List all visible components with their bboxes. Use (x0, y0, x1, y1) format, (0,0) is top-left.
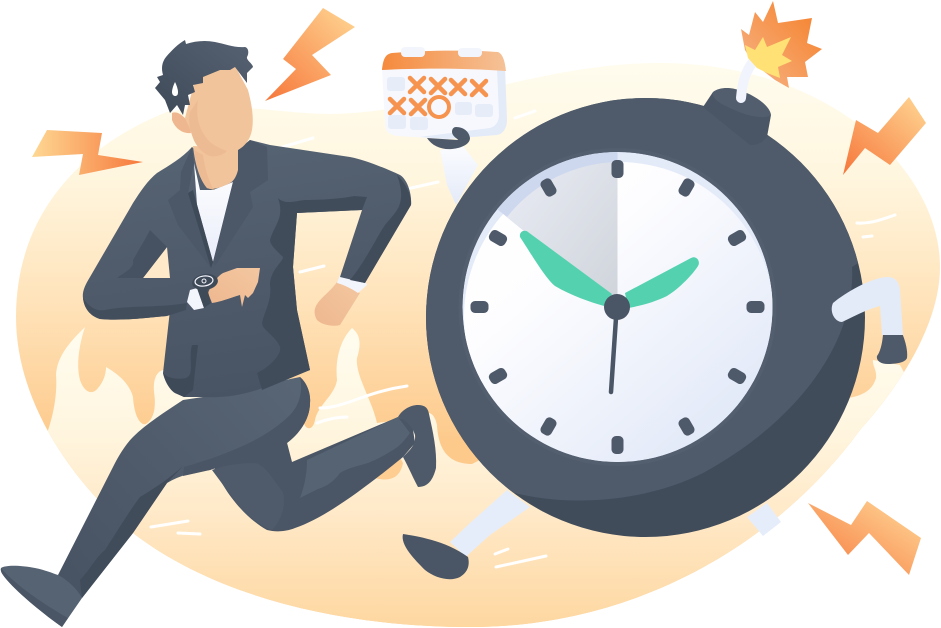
bomb left shoe (403, 534, 469, 579)
watch (191, 272, 219, 292)
watch strap (197, 288, 211, 308)
shirt edge dark strip (188, 190, 213, 268)
face base ring (462, 152, 772, 462)
lightning bolt right (843, 97, 926, 175)
calendar (382, 47, 507, 149)
jacket gap between arm and torso (143, 247, 170, 278)
rear trouser leg (212, 417, 415, 531)
forearm underside shade (83, 298, 187, 320)
calendar edge (420, 68, 507, 139)
ear (172, 112, 191, 133)
bomb cap top face (713, 88, 771, 117)
lower flame drip behind back leg (376, 458, 403, 480)
jacket lower shade (163, 345, 198, 397)
calendar body (382, 68, 507, 139)
watch cuff (187, 288, 204, 310)
bomb right arm (832, 277, 903, 335)
second hand (611, 318, 616, 392)
shirt (194, 163, 233, 262)
thigh lower shade (183, 377, 310, 476)
running man (1, 40, 436, 627)
calendar crosses (390, 78, 486, 114)
right lapel (213, 140, 268, 266)
calendar cells (387, 77, 493, 130)
neck shade (194, 150, 214, 190)
rear leg light panel (300, 417, 410, 498)
explosion flame (741, 1, 822, 88)
bomb left arm (440, 146, 478, 205)
centre hub (604, 294, 630, 320)
minute hand (520, 231, 612, 306)
neck (193, 146, 238, 189)
fuse (741, 63, 752, 98)
bomb body lit area (420, 90, 870, 501)
blue sector crescent (497, 152, 618, 231)
hair (155, 40, 253, 115)
rear shoe (398, 405, 436, 487)
speed lines (151, 111, 895, 567)
bomb cap front (703, 92, 771, 145)
sleeve shade left (117, 230, 167, 278)
front shoe (1, 566, 82, 627)
face (185, 62, 253, 157)
front shoe shade (1, 568, 68, 627)
clock face (462, 152, 774, 472)
watch case (191, 272, 219, 292)
face shade (189, 100, 227, 156)
watch dial (194, 275, 214, 287)
bomb clock character (403, 1, 907, 579)
bomb right hand (877, 333, 907, 364)
forearm shade (350, 175, 411, 283)
jacket (83, 140, 411, 397)
bomb left leg (450, 490, 530, 557)
trouser front leg (58, 377, 310, 598)
bomb body shaded (426, 98, 865, 537)
clock bezel (458, 148, 776, 466)
hour ticks (470, 160, 764, 454)
calendar header (382, 51, 506, 71)
hour hand (625, 257, 699, 308)
hand on the right (315, 282, 360, 326)
jacket right side shade (257, 196, 367, 390)
lightning bolt top (265, 8, 355, 101)
lightning bolt left (32, 130, 143, 175)
cream flames lower area (0, 327, 941, 628)
grey elapsed sector (507, 162, 618, 307)
watch hand (208, 268, 260, 307)
lightning bolt bottom (808, 501, 921, 575)
hand right cuff (337, 275, 367, 293)
bomb right leg (747, 503, 781, 536)
calendar circle mark (429, 97, 449, 117)
rear knee panel (212, 463, 284, 530)
left lapel (168, 147, 213, 268)
front leg shadow (80, 466, 183, 598)
holding hand (427, 127, 470, 149)
calendar rings (401, 47, 425, 57)
explosion yellow core (745, 37, 792, 78)
watch centre (202, 279, 206, 283)
sweat drop (172, 82, 178, 96)
face inner (464, 162, 774, 472)
